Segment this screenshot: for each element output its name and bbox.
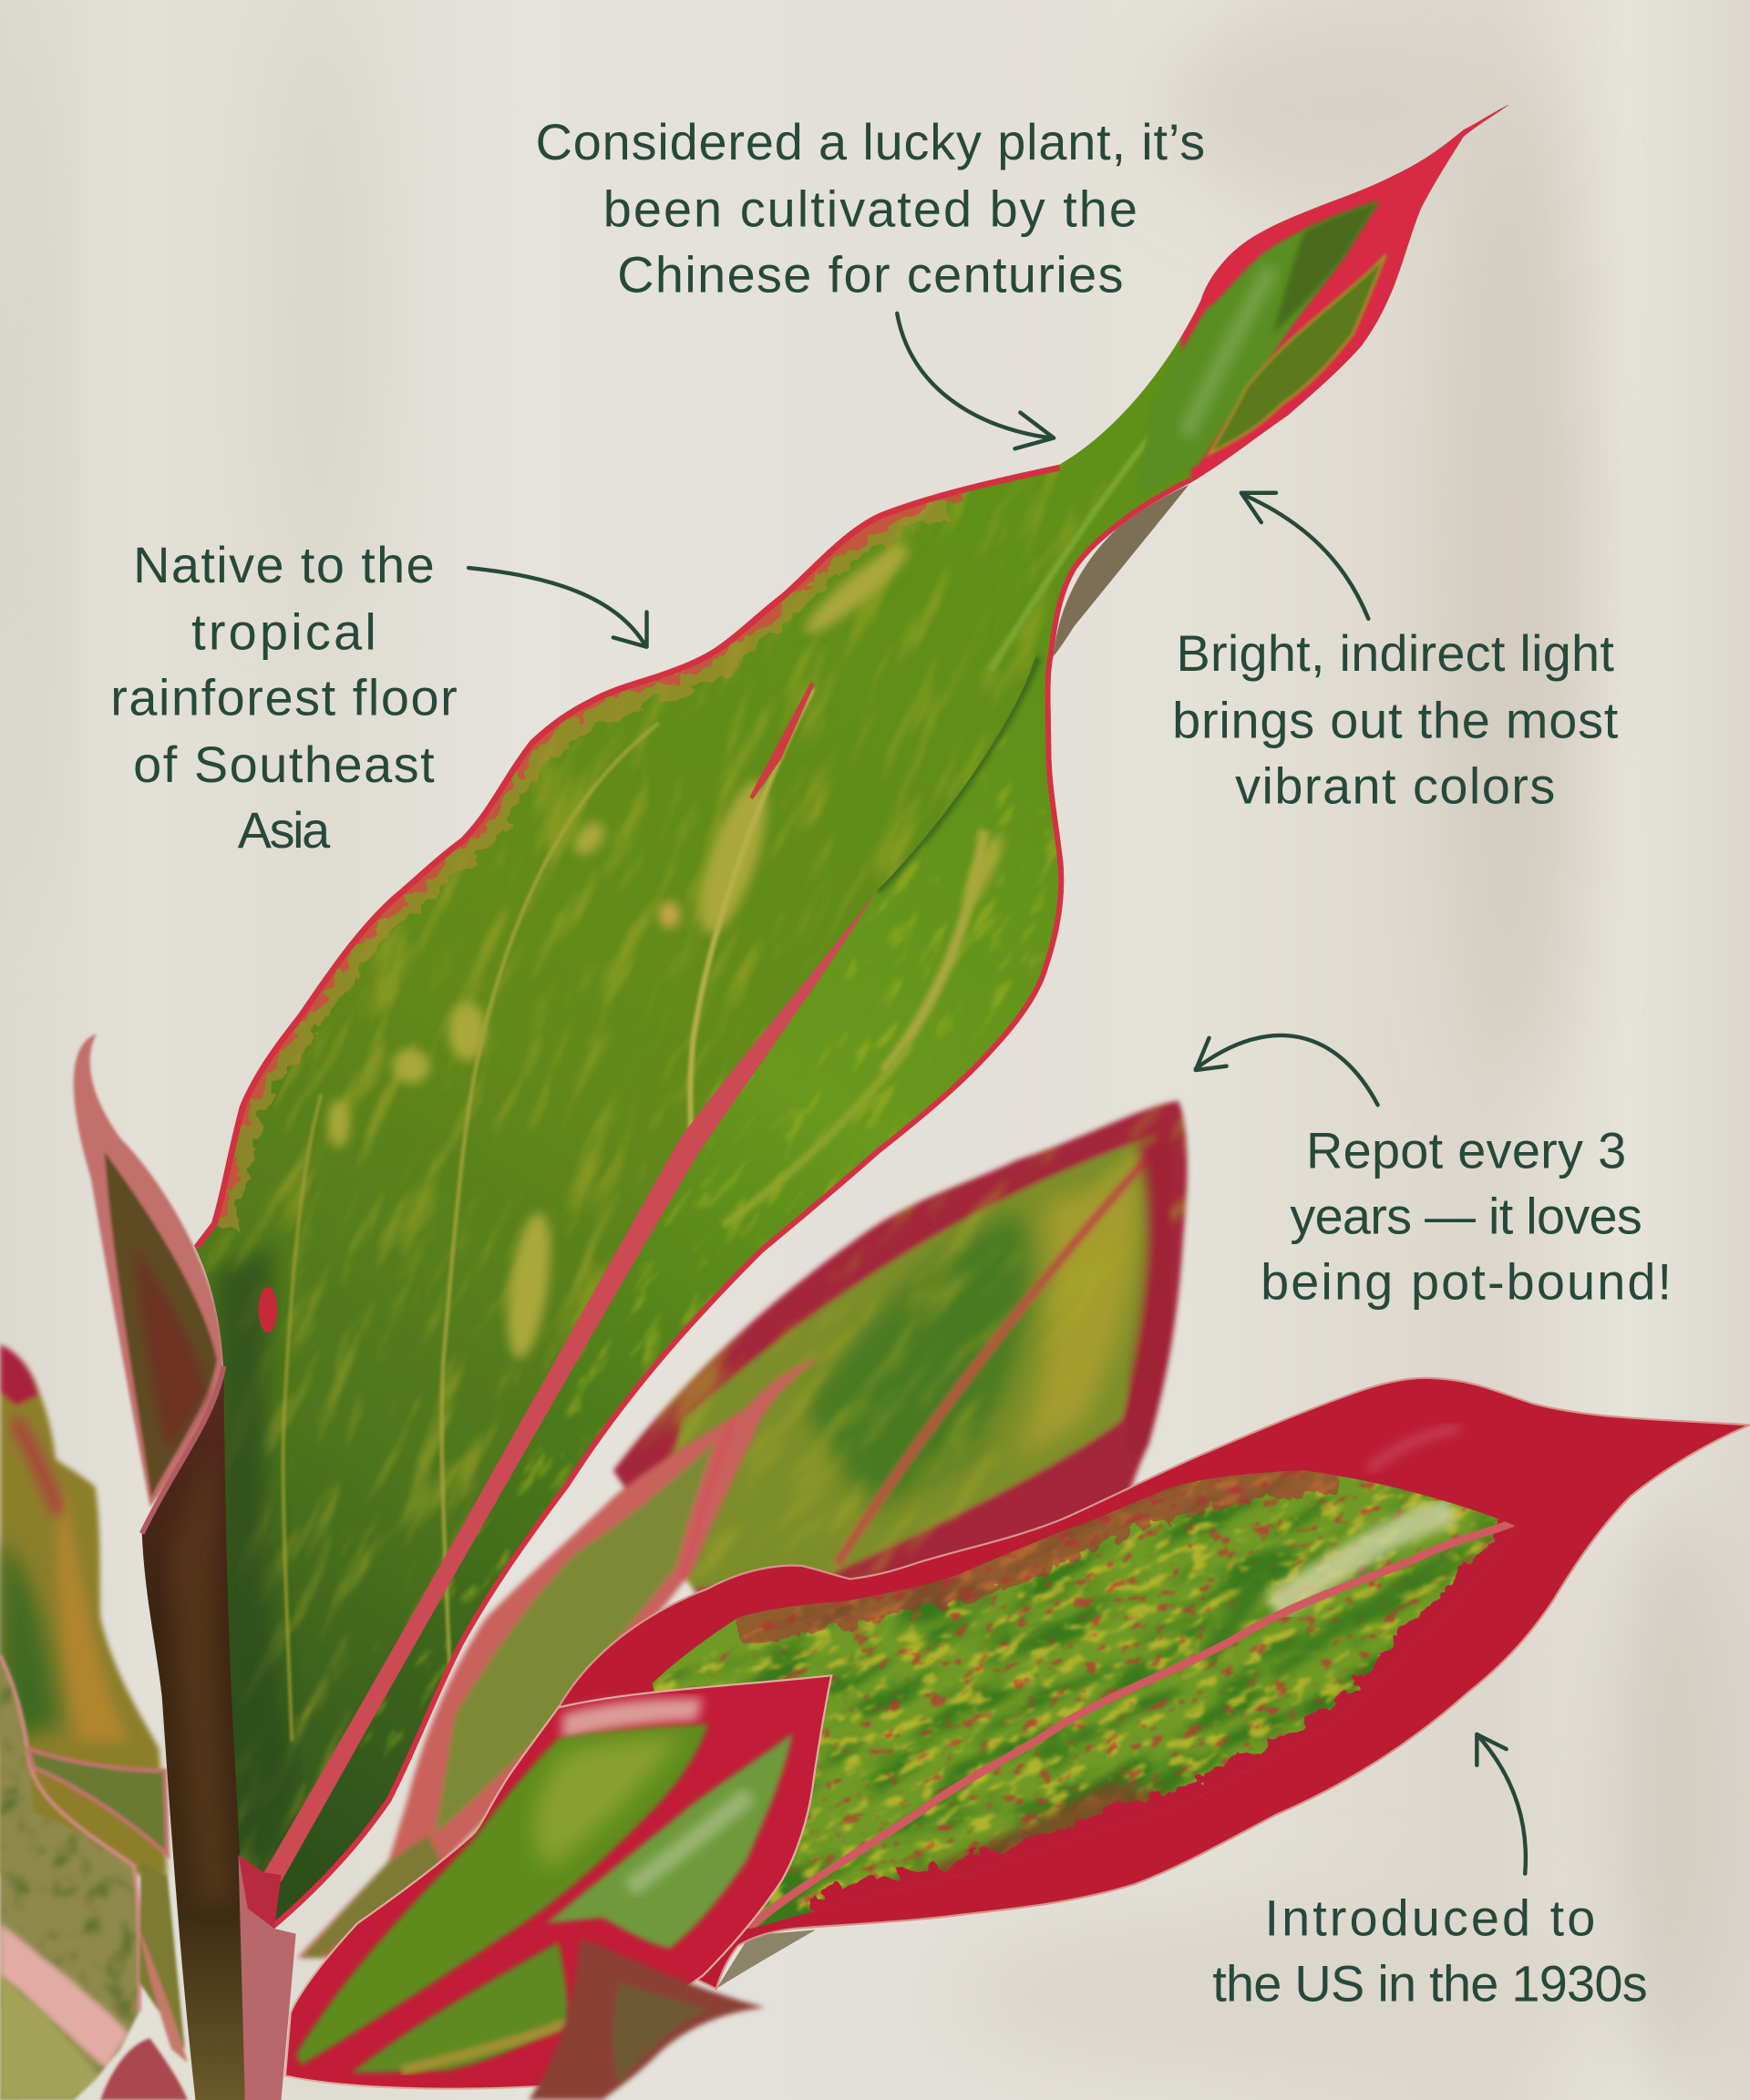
midrib (745, 1523, 1513, 1931)
dark stem sheath (142, 1366, 296, 2100)
text: light (1172, 624, 1619, 815)
text: history: Introduced to (1264, 1889, 1595, 1946)
veins (283, 402, 1179, 1741)
arrow: repotting (1196, 1035, 1378, 1105)
blurred back leaf (610, 1097, 1192, 1594)
small leaf pale gloss (629, 1795, 750, 1889)
red upper margin (194, 465, 1059, 1246)
tip gloss (1185, 268, 1272, 436)
text: lucky plant: Considered a lucky plant, it’s (536, 113, 1205, 170)
main leaf (194, 104, 1509, 1929)
red leaf blade (559, 1378, 1750, 1989)
annotation: light (1172, 493, 1619, 815)
lower dark zone (817, 1781, 1191, 1915)
red lower margin (274, 482, 1191, 1929)
text: lucky plant (536, 113, 1205, 303)
text: repotting: Repot every 3 (1306, 1121, 1626, 1179)
upper red fleck band (737, 1473, 1339, 1627)
text: light: vibrant colors (1235, 757, 1555, 815)
ragged red border (816, 1527, 1517, 1911)
tip dark patch (1272, 201, 1379, 335)
yellow patches (328, 536, 1008, 1362)
curled back leaf (74, 1034, 223, 1507)
small leaf bottom green (351, 1942, 569, 2074)
red streak (751, 683, 813, 798)
text: native range (110, 536, 458, 859)
red tip (1179, 80, 1527, 485)
text: lucky plant: Chinese for centuries (617, 245, 1124, 303)
text: repotting (1261, 1121, 1672, 1310)
dark left strip (214, 1246, 294, 1868)
pink stalk (238, 1855, 296, 2100)
red front leaf (541, 1264, 1750, 2097)
annotation: history (1212, 1735, 1648, 2012)
main leaf underside (1054, 485, 1189, 656)
upper blade mottling (204, 461, 1104, 1872)
arrow: light (1241, 493, 1368, 619)
text: light: brings out the most (1172, 692, 1619, 749)
sheath brown texture (168, 1446, 231, 1902)
dark green lower streak (1272, 1553, 1453, 1674)
blurred bud at bottom (529, 1940, 765, 2100)
text: native range: Asia (238, 801, 331, 859)
annotation: lucky plant (536, 113, 1205, 448)
text: lucky plant: been cultivated by the (603, 180, 1138, 237)
small leaf bottom band (402, 2023, 569, 2071)
text: repotting: being pot-bound! (1261, 1252, 1672, 1310)
mid left pale leaf (0, 1647, 188, 2100)
tip green patch (1138, 201, 1379, 499)
text: native range: Native to the (133, 536, 435, 593)
small front leaf (285, 1675, 831, 2089)
small leaf yellow tones (534, 1735, 683, 1868)
red leaf underside (716, 1930, 816, 1989)
small leaf upper pale edge (562, 1698, 703, 1741)
main leaf surface detail (194, 104, 1509, 1929)
sheath pink edge (142, 1366, 223, 1533)
lower lobe (157, 536, 1205, 1955)
text: history (1212, 1889, 1648, 2012)
main leaf blade (194, 105, 1509, 1929)
blurred pink back leaf (297, 1355, 826, 1958)
arrow: lucky plant (897, 314, 1054, 448)
pale centre glow (1272, 1510, 1453, 1607)
dark green streak (1205, 1560, 1265, 1661)
spot on main leaf (259, 1287, 277, 1333)
red ragged upper margin (211, 488, 964, 1223)
back left leaves (0, 1344, 168, 1875)
small leaf blade (285, 1675, 831, 2089)
midrib (259, 890, 877, 1881)
tip second patch (1210, 254, 1385, 454)
annotation: native range (110, 536, 647, 859)
small leaf upper green (296, 1724, 708, 2065)
text: history: the US in the 1930s (1212, 1954, 1648, 2012)
text: native range: of Southeast (133, 736, 435, 793)
text: native range: rainforest floor (110, 669, 458, 726)
mottled upper margin (211, 499, 937, 1228)
arrow: native range (468, 568, 647, 647)
red stalk join (238, 1855, 281, 1929)
red leaf variegated centre (541, 1264, 1628, 2097)
annotation: repotting (1196, 1035, 1672, 1310)
small leaf right green (546, 1733, 793, 1949)
text: repotting: years — it loves (1290, 1187, 1642, 1244)
text: native range: tropical (191, 603, 376, 661)
arrow: history (1477, 1735, 1526, 1874)
text: light: Bright, indirect light (1177, 624, 1614, 682)
red leaf sheen (1368, 1427, 1459, 1470)
